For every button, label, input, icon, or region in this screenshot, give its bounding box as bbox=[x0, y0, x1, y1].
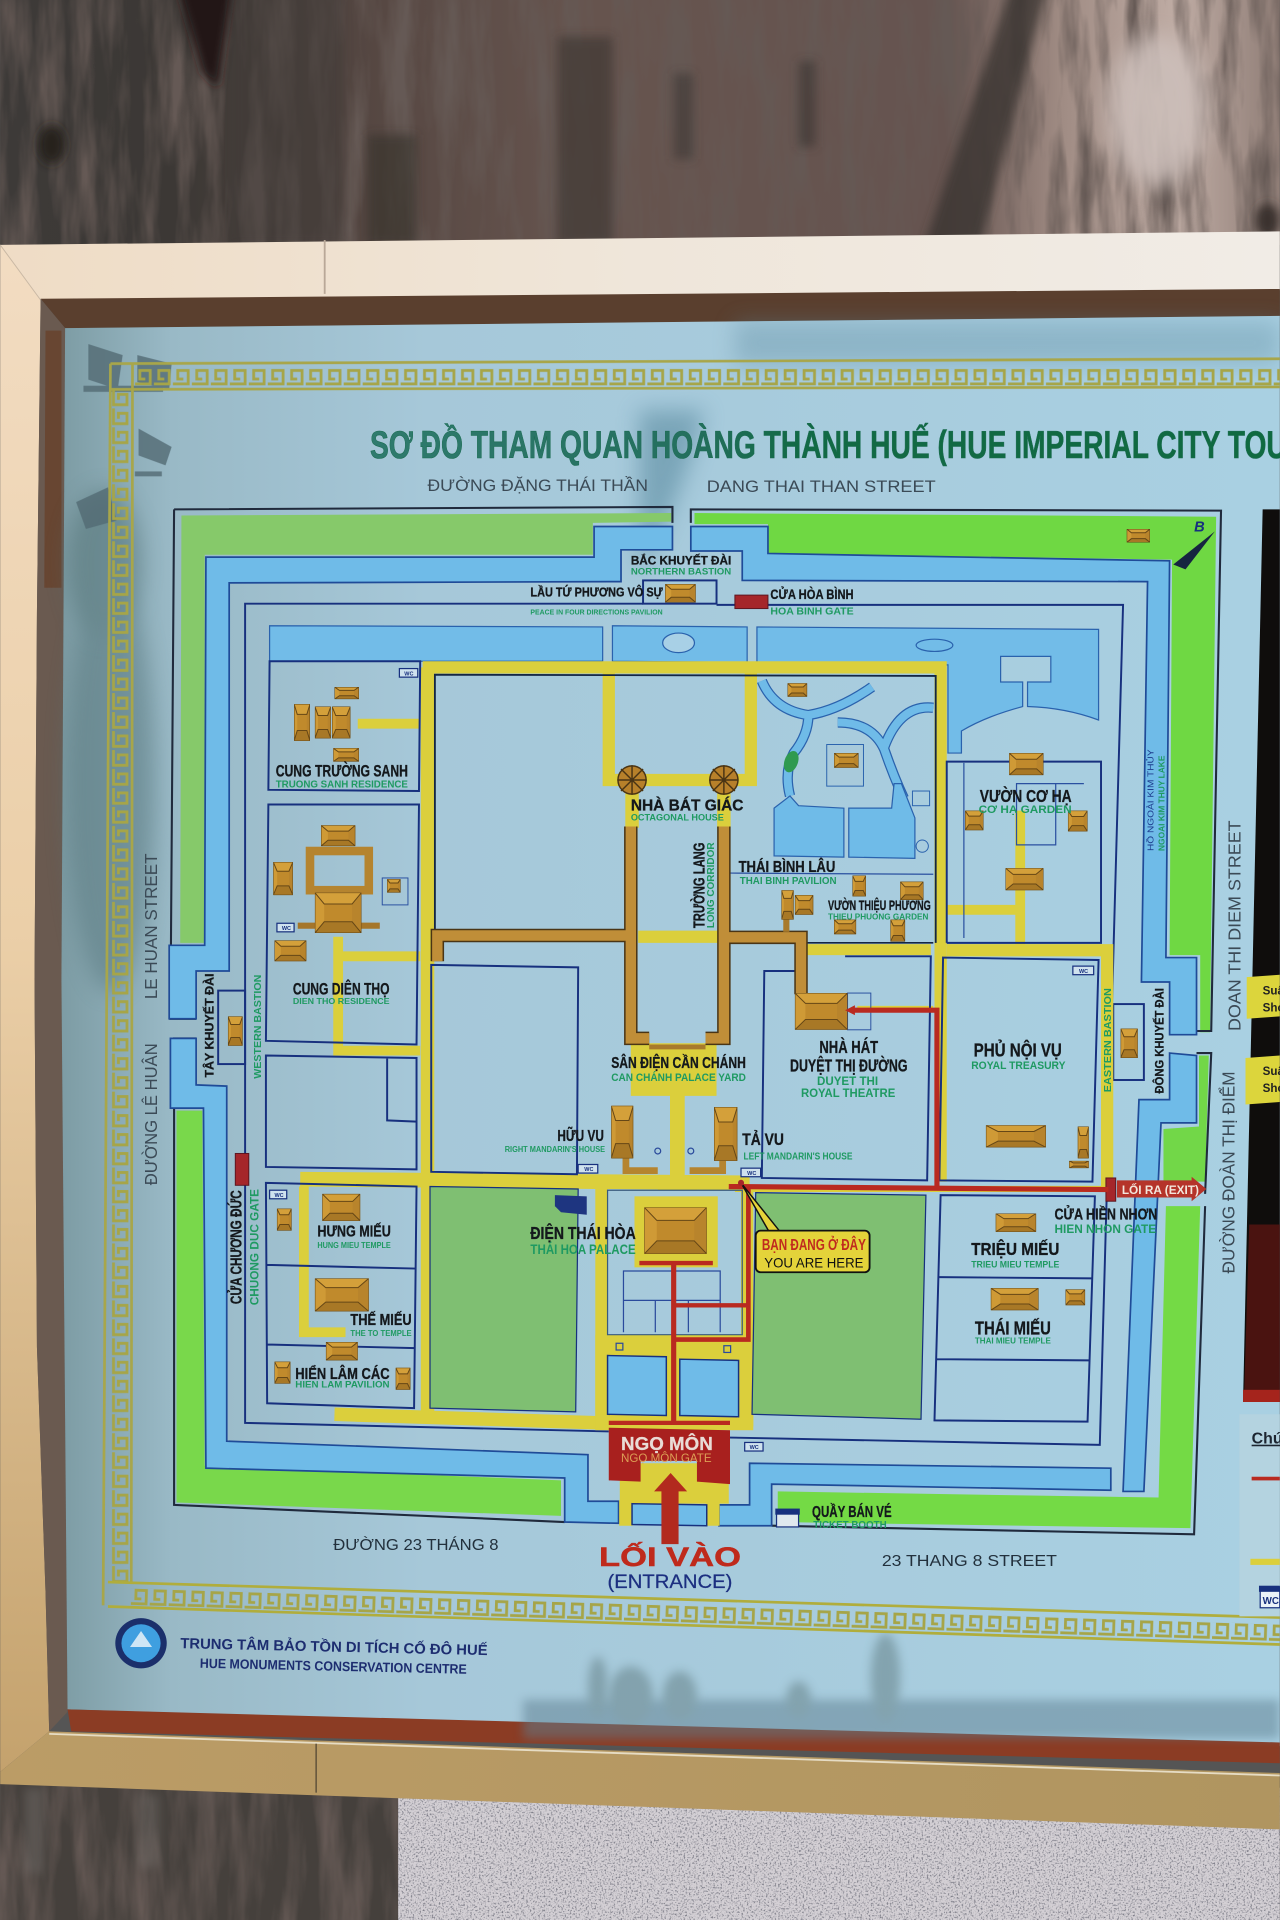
legend panel bbox=[1239, 1414, 1280, 1616]
labels: southeast temples bbox=[971, 1205, 1157, 1345]
legend panel: WC bbox=[1263, 1596, 1279, 1607]
labels: northeast: CƠ HẠ GARDEN bbox=[979, 804, 1072, 816]
labels: west precincts: THE TO TEMPLE bbox=[350, 1328, 412, 1338]
labels: west precincts: THẾ MIẾU bbox=[350, 1312, 412, 1329]
ticket booth: TICKET BOOTH bbox=[813, 1520, 887, 1531]
map: Dien Tho courtyard bbox=[298, 851, 871, 1030]
street labels top: DANG THAI THAN STREET bbox=[707, 477, 936, 496]
map: Thai Binh Lau pond bbox=[762, 681, 933, 858]
glass panel bbox=[61, 316, 1280, 1746]
footer: organisation name bbox=[180, 1634, 488, 1677]
labels: central: RIGHT MANDARIN'S HOUSE bbox=[505, 1144, 605, 1154]
labels: northeast: THAI BINH PAVILION bbox=[740, 876, 837, 887]
map: green lawns bbox=[430, 1187, 926, 1419]
glass reflections bbox=[66, 321, 1280, 1739]
arrow: route into theatre bbox=[845, 1005, 855, 1015]
labels: northeast: VƯỜN CƠ HẠ bbox=[980, 785, 1072, 806]
Ngo Mon gate: NGỌ MÔN GATE bbox=[621, 1450, 712, 1465]
callout: you are here: BẠN ĐANG Ở ĐÂY bbox=[762, 1235, 866, 1254]
WC icons: WC bbox=[282, 926, 291, 932]
labels: theatre and treasury: DUYỆT THỊ ĐƯỜNG bbox=[790, 1055, 908, 1075]
street labels top: ĐƯỜNG ĐẶNG THÁI THẦN bbox=[428, 476, 648, 495]
exit arrow: LỐI RA (EXIT) bbox=[1122, 1183, 1199, 1197]
street labels top bbox=[428, 476, 936, 496]
WC icons: WC bbox=[404, 671, 413, 677]
labels: west precincts bbox=[276, 761, 412, 1389]
labels: north: BẮC KHUYẾT ĐÀI bbox=[631, 554, 731, 567]
labels: north: NORTHERN BASTION bbox=[631, 566, 731, 576]
labels: west precincts: HIỂN LÂM CÁC bbox=[295, 1365, 390, 1383]
Ngo Mon gate: NGỌ MÔN bbox=[621, 1433, 713, 1454]
labels: north: HOA BINH GATE bbox=[770, 607, 854, 618]
map: inner citadel wall and bastions bbox=[218, 580, 1144, 1445]
labels: north: B bbox=[1194, 519, 1205, 535]
callout: you are here bbox=[738, 1180, 870, 1272]
labels: north: LẦU TỨ PHƯƠNG VÔ SỰ bbox=[530, 584, 663, 599]
labels: west precincts: CUNG DIÊN THỌ bbox=[293, 979, 390, 998]
map: long corridor bbox=[437, 827, 801, 1047]
labels: east vertical: ĐÔNG KHUYẾT ĐÀI bbox=[1151, 988, 1166, 1093]
wall background bbox=[0, 0, 1280, 245]
labels: west precincts: DIEN THO RESIDENCE bbox=[293, 996, 390, 1006]
labels: central: OCTAGONAL HOUSE bbox=[631, 812, 724, 822]
labels: west vertical: LE HUAN STREET bbox=[141, 853, 161, 999]
labels: central bbox=[505, 796, 853, 1257]
labels: central: THÁI HOA PALACE bbox=[530, 1242, 636, 1257]
map: octagonal houses bbox=[617, 765, 739, 795]
map: palace courtyard bbox=[608, 1148, 742, 1352]
logo bbox=[115, 1618, 167, 1668]
labels: central: TẢ VU bbox=[742, 1130, 784, 1149]
map: corridors beside mandarin houses bbox=[626, 1157, 723, 1171]
labels: west vertical: CHUONG DUC GATE bbox=[248, 1189, 262, 1305]
lower wall and granite base bbox=[0, 1763, 1280, 1920]
labels: theatre and treasury: DUYET THI bbox=[817, 1075, 878, 1088]
labels: southeast temples: TRIỆU MIẾU bbox=[971, 1238, 1059, 1259]
labels: east vertical: EASTERN BASTION bbox=[1103, 988, 1114, 1092]
labels: theatre and treasury: ROYAL TREASURY bbox=[971, 1060, 1066, 1072]
labels: central: LEFT MANDARIN'S HOUSE bbox=[743, 1152, 853, 1163]
entrance label: LỐI VÀO bbox=[599, 1540, 741, 1572]
WC icons: WC bbox=[1079, 969, 1088, 975]
labels: west precincts: HIEN LAM PAVILION bbox=[295, 1379, 390, 1389]
exit arrow bbox=[1117, 1177, 1206, 1201]
map: precinct outlines bbox=[266, 661, 1101, 1422]
labels: north: CỬA HÒA BÌNH bbox=[770, 585, 854, 602]
labels: southeast temples: THÁI MIẾU bbox=[975, 1318, 1051, 1339]
arrow: entrance bbox=[654, 1473, 687, 1544]
labels: southeast temples: CỬA HIỀN NHƠN bbox=[1054, 1205, 1157, 1224]
labels: east vertical: NGOAI KIM THUY LAKE bbox=[1157, 755, 1167, 851]
labels: west vertical: ĐƯỜNG LÊ HUÂN bbox=[141, 1043, 161, 1185]
entrance label: (ENTRANCE) bbox=[608, 1572, 732, 1593]
labels: north bbox=[530, 519, 1205, 618]
street labels bottom: 23 THANG 8 STREET bbox=[882, 1553, 1057, 1570]
rusty lower frame edge bbox=[68, 1709, 1280, 1763]
callout: you are here: YOU ARE HERE bbox=[764, 1255, 863, 1270]
WC icons: WC bbox=[750, 1445, 759, 1451]
map: inner ponds bbox=[270, 626, 1099, 753]
labels: west vertical: CỬA CHƯƠNG ĐỨC bbox=[227, 1190, 245, 1304]
WC icons: WC bbox=[584, 1167, 593, 1173]
labels: north: PEACE IN FOUR DIRECTIONS PAVILION bbox=[530, 608, 663, 617]
map: gates bbox=[235, 595, 1116, 1201]
map: red tour route bbox=[609, 1010, 1108, 1424]
decorative key border bbox=[103, 359, 1280, 1644]
labels: west vertical bbox=[141, 853, 264, 1305]
labels: east vertical: HỒ NGOÀI KIM THỦY bbox=[1145, 749, 1156, 851]
labels: central: ĐIỆN THÁI HÒA bbox=[530, 1222, 636, 1243]
labels: central: LONG CORRIDOR bbox=[706, 842, 717, 928]
labels: central: SÂN ĐIỆN CẦN CHÁNH bbox=[611, 1054, 746, 1072]
entrance label bbox=[599, 1540, 741, 1593]
labels: central: CAN CHÁNH PALACE YARD bbox=[611, 1071, 746, 1084]
map: blue pools at Ngo Mon bbox=[608, 1356, 739, 1526]
reflection: floodlights bbox=[76, 344, 172, 529]
labels: east vertical: DOAN THI DIEM STREET bbox=[1225, 820, 1245, 1031]
labels: northeast: THIEU PHUONG GARDEN bbox=[828, 912, 928, 922]
compass needle bbox=[1173, 531, 1215, 569]
labels: central: HỮU VU bbox=[557, 1127, 604, 1145]
ticket booth: QUẦY BÁN VÉ bbox=[812, 1502, 892, 1521]
street labels bottom: ĐƯỜNG 23 THÁNG 8 bbox=[333, 1535, 499, 1554]
ticket booth bbox=[775, 1502, 892, 1531]
labels: theatre and treasury bbox=[790, 1037, 1066, 1100]
labels: west precincts: CUNG TRƯỜNG SANH bbox=[276, 761, 408, 780]
yellow caption tags bbox=[1246, 975, 1280, 1104]
WC icons bbox=[270, 669, 1094, 1451]
labels: southeast temples: TRIEU MIEU TEMPLE bbox=[971, 1259, 1059, 1269]
labels: central: NHÀ BÁT GIÁC bbox=[631, 796, 744, 815]
WC icons: WC bbox=[274, 1193, 284, 1199]
labels: northeast bbox=[739, 785, 1072, 922]
map: buildings bbox=[228, 529, 1150, 1390]
Ngo Mon gate bbox=[609, 1428, 730, 1484]
labels: west vertical: WESTERN BASTION bbox=[253, 975, 264, 1079]
map: outer green ring bbox=[170, 507, 1221, 1534]
street labels bottom bbox=[333, 1535, 1057, 1570]
footer: organisation name: HUE MONUMENTS CONSERVATION CENTRE bbox=[200, 1656, 467, 1677]
labels: northeast: VƯỜN THIỆU PHƯƠNG bbox=[828, 898, 931, 913]
WC icons: WC bbox=[747, 1171, 756, 1177]
labels: east vertical: ĐƯỜNG ĐOÀN THỊ ĐIỂM bbox=[1217, 1071, 1238, 1273]
right photo panel bbox=[1243, 509, 1280, 1402]
labels: west vertical: TÂY KHUYẾT ĐÀI bbox=[201, 973, 216, 1078]
footer: organisation name: TRUNG TÂM BẢO TỒN DI TÍCH CỐ ĐÔ HUẾ bbox=[180, 1634, 488, 1659]
labels: southeast temples: THAI MIEU TEMPLE bbox=[975, 1336, 1051, 1345]
labels: theatre and treasury: NHÀ HÁT bbox=[819, 1037, 879, 1057]
labels: theatre and treasury: PHỦ NỘI VỤ bbox=[974, 1040, 1062, 1061]
labels: central: TRƯỜNG LANG bbox=[690, 842, 708, 928]
labels: west precincts: HƯNG MIẾU bbox=[317, 1222, 391, 1241]
labels: northeast: THÁI BÌNH LÂU bbox=[739, 858, 835, 876]
labels: west precincts: TRUONG SANH RESIDENCE bbox=[276, 779, 408, 790]
labels: southeast temples: HIEN NHON GATE bbox=[1054, 1223, 1156, 1236]
labels: east vertical bbox=[1103, 749, 1245, 1273]
map: yellow visitor roads bbox=[300, 667, 1108, 1526]
map: moat bbox=[169, 527, 1197, 1526]
labels: theatre and treasury: ROYAL THEATRE bbox=[801, 1087, 896, 1100]
labels: west precincts: HUNG MIEU TEMPLE bbox=[317, 1241, 391, 1250]
